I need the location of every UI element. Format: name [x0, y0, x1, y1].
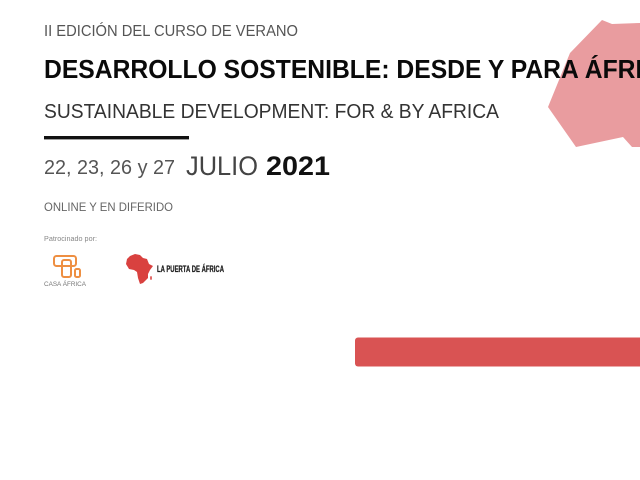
icon: Africa map — [126, 254, 153, 284]
title underline — [44, 136, 189, 139]
date month: JULIO — [186, 151, 258, 181]
edition heading: II EDICIÓN DEL CURSO DE VERANO — [44, 21, 298, 40]
logo: La Puerta de África — [126, 254, 224, 284]
Casa África wordmark: CASA ÁFRICA — [44, 281, 86, 288]
decorative pink Africa shape — [548, 20, 640, 147]
red bar — [355, 338, 640, 366]
delivery format: ONLINE Y EN DIFERIDO — [44, 200, 173, 214]
sponsors label: Patrocinado por: — [44, 236, 97, 243]
icon: Casa África mark — [54, 256, 80, 277]
icon: Madagascar — [150, 276, 152, 280]
date year: 2021 — [266, 151, 330, 181]
logo: Casa África — [44, 256, 86, 288]
La Puerta de África wordmark: LA PUERTA DE ÁFRICA — [157, 264, 224, 274]
date days: 22, 23, 26 y 27 — [44, 157, 175, 179]
English subtitle: SUSTAINABLE DEVELOPMENT: FOR & BY AFRICA — [44, 101, 500, 123]
